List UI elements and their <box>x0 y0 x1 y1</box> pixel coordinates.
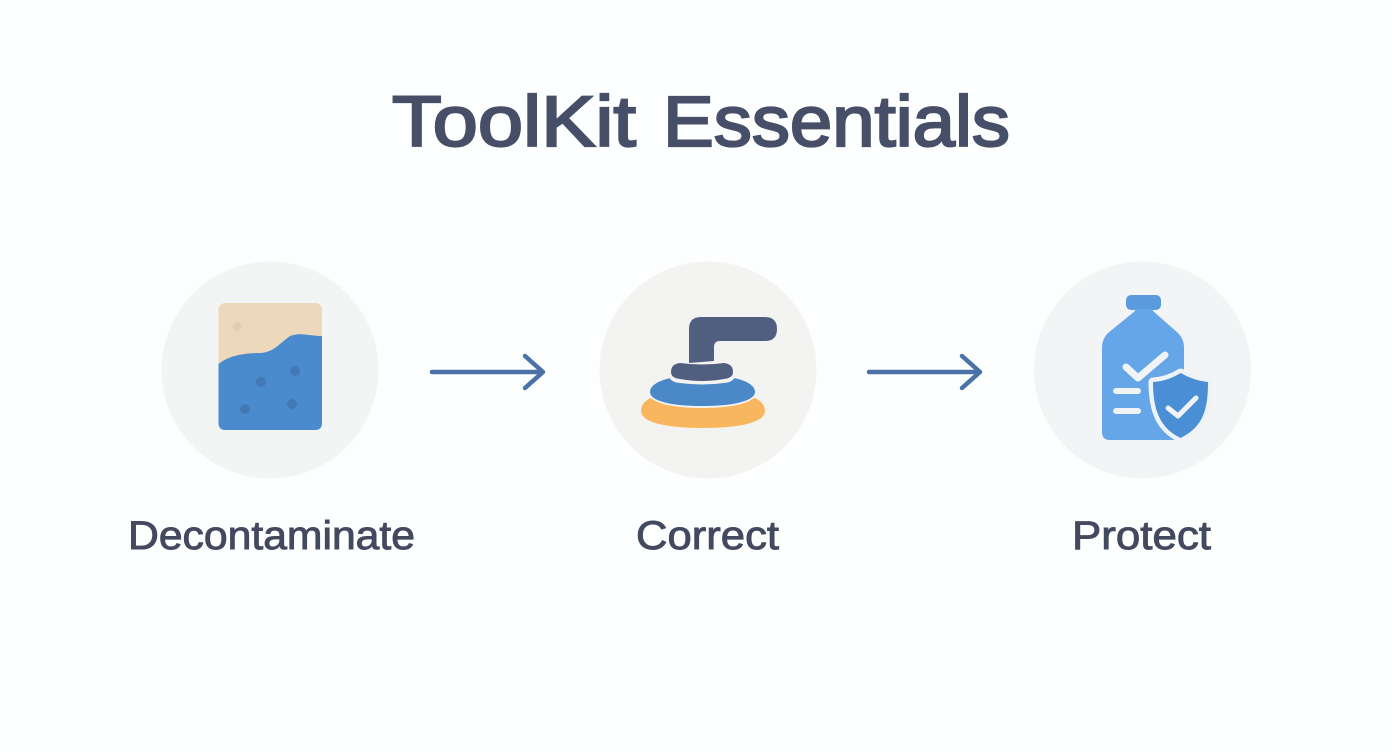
panel: decontaminate <box>128 262 415 558</box>
arrow: decontaminate to correct <box>432 356 543 388</box>
arrow: correct to protect <box>869 356 980 388</box>
icon background circle: correct <box>600 262 816 478</box>
icon background circle: decontaminate <box>162 262 378 478</box>
icon: polisher <box>641 317 777 428</box>
icon background circle: protect <box>1034 262 1251 478</box>
panel: protect <box>1034 262 1251 558</box>
label: decontaminate: Decontaminate <box>128 514 415 558</box>
icon: clay bar <box>218 303 322 430</box>
icon: bottle with shield <box>1102 295 1208 440</box>
panel: correct <box>600 262 816 558</box>
title <box>392 83 1010 162</box>
title: ToolKit <box>392 83 636 162</box>
label: protect: Protect <box>1072 514 1211 558</box>
title: Essentials <box>663 83 1010 162</box>
label: correct: Correct <box>636 514 779 558</box>
